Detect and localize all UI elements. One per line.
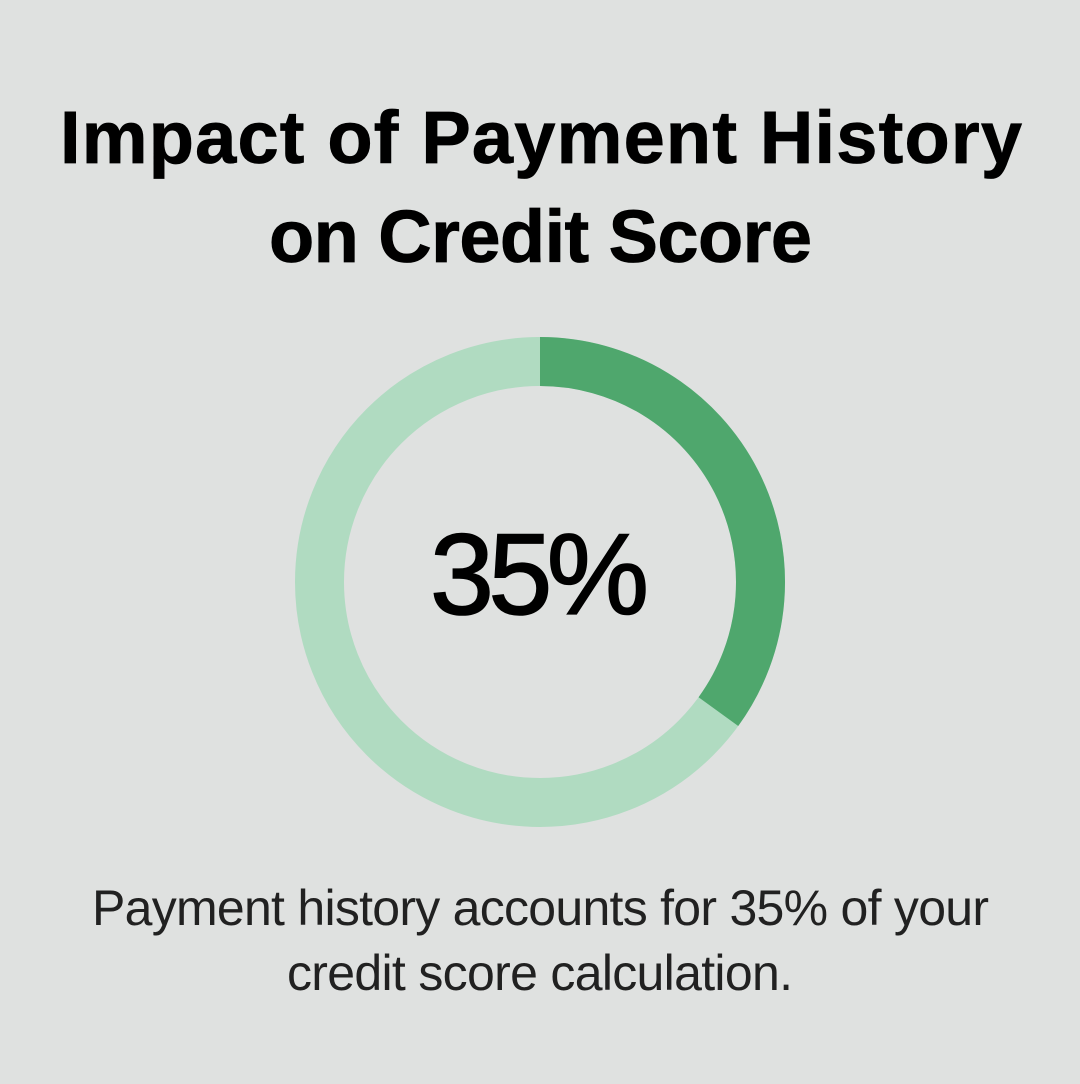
title	[60, 96, 1022, 278]
caption	[92, 880, 989, 1001]
caption: Payment history accounts for 35% of your	[92, 880, 989, 936]
donut chart: 35%	[320, 362, 761, 802]
donut value arc	[540, 362, 761, 712]
donut track	[320, 362, 760, 802]
title: Impact of Payment History	[60, 96, 1022, 179]
caption: credit score calculation.	[287, 945, 793, 1001]
center value: 35%	[430, 511, 649, 639]
title: on Credit Score	[269, 195, 812, 278]
